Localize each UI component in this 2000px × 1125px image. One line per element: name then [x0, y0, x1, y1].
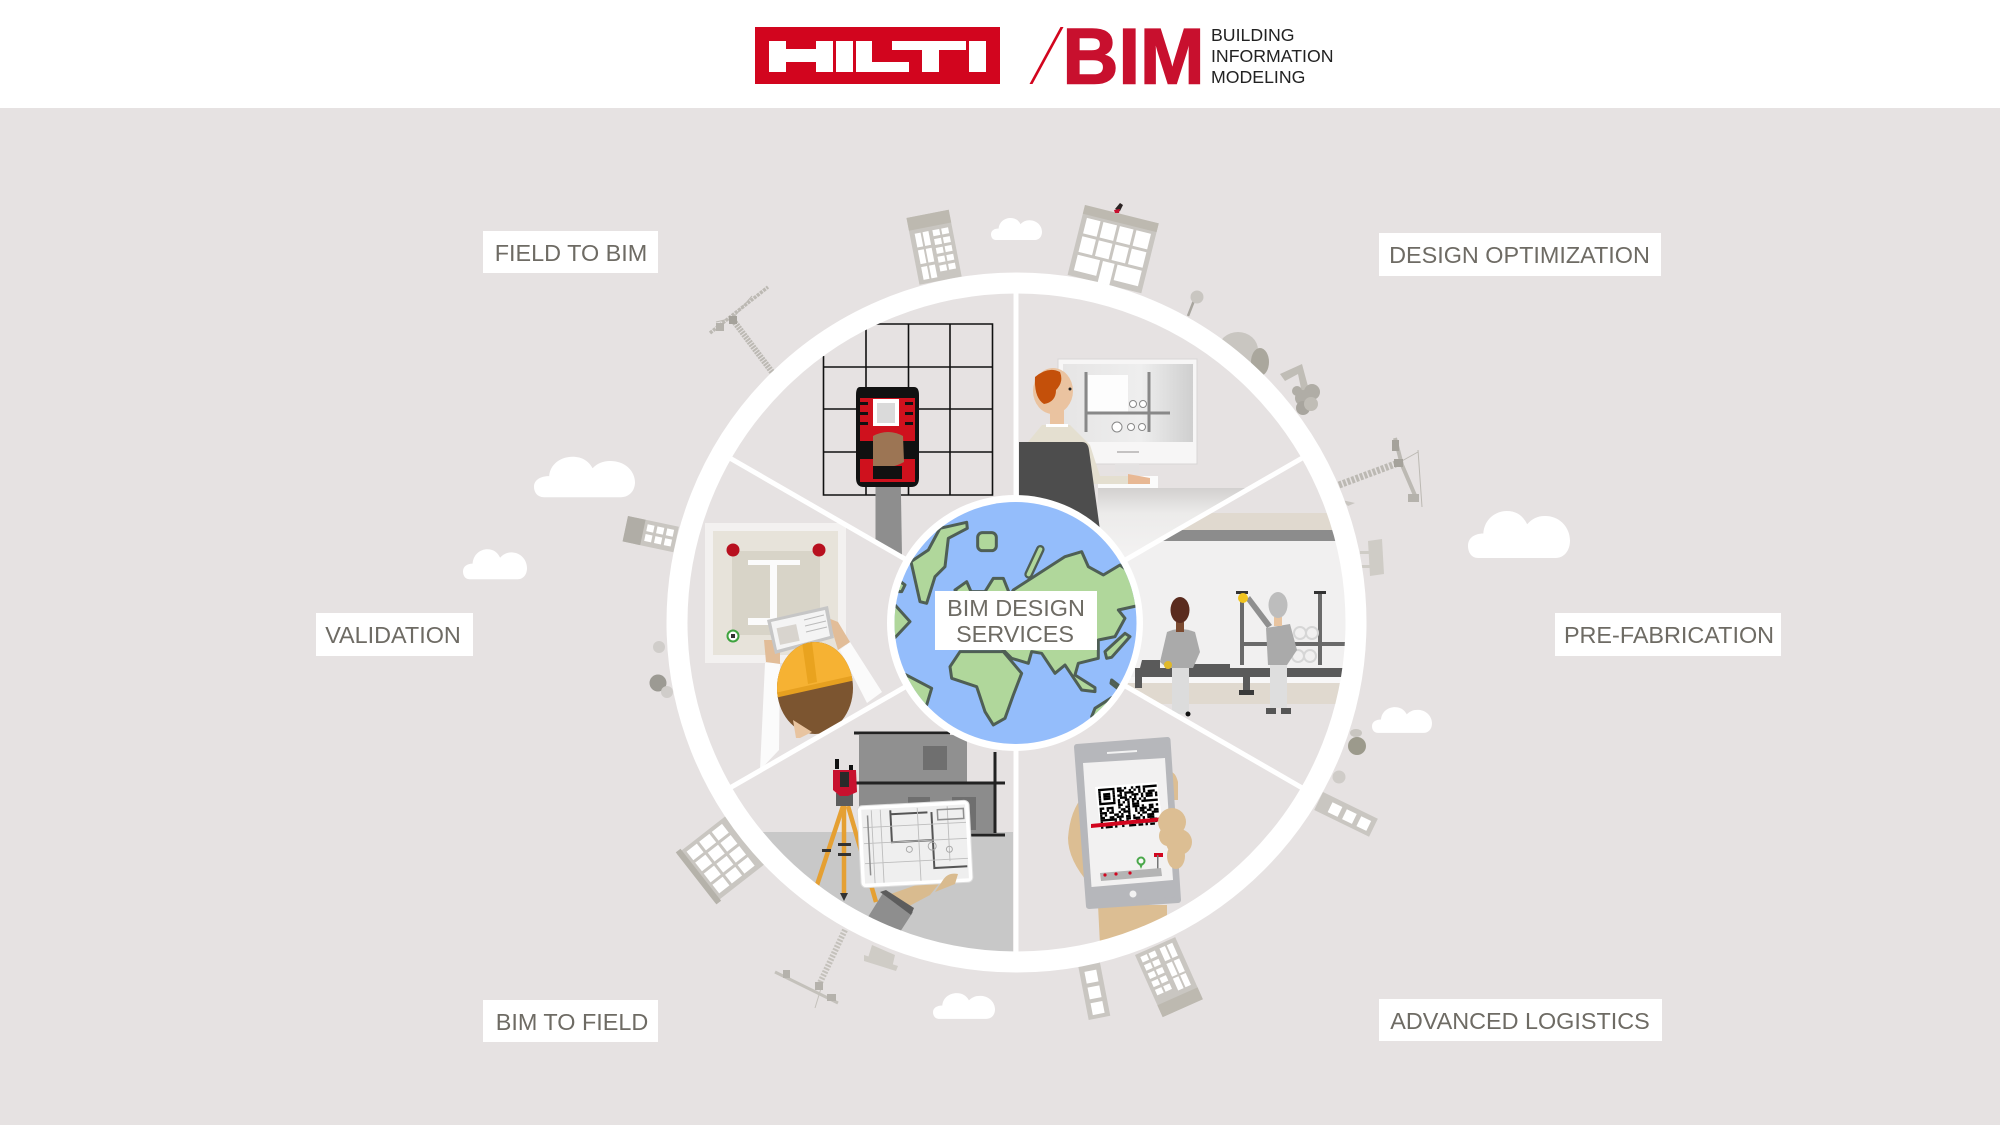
centre label: SERVICES	[956, 621, 1074, 647]
africa	[950, 652, 1022, 725]
label: BIM to field: BIM TO FIELD	[496, 1009, 648, 1035]
label: validation	[316, 613, 473, 656]
keyboard	[1098, 476, 1158, 488]
crane right	[1339, 438, 1422, 507]
hand on scanner	[873, 432, 904, 467]
south-west land	[895, 674, 932, 708]
logo: HILTI	[755, 27, 1000, 84]
wheel interior panels	[660, 324, 1350, 982]
logo tagline: BUILDING	[1211, 25, 1295, 45]
tripod	[817, 793, 876, 902]
building lower storey	[859, 783, 995, 833]
ceiling beam	[1163, 530, 1336, 541]
americas edge	[885, 598, 910, 642]
arctic island fill	[1029, 549, 1040, 574]
arm	[876, 487, 902, 554]
logo tagline	[1211, 25, 1334, 87]
header band	[0, 0, 2000, 108]
label: advanced logistics	[1379, 999, 1662, 1041]
building right lower	[1314, 792, 1378, 837]
logo: BIM: BIM	[1062, 12, 1204, 100]
phone	[1077, 740, 1178, 906]
scan line	[1091, 818, 1159, 828]
label: design optimization: DESIGN OPTIMIZATION	[1389, 242, 1650, 268]
panel: BIM to field	[763, 732, 1013, 952]
total station	[833, 759, 857, 796]
ladder right	[1360, 539, 1384, 576]
rear fingers	[1172, 772, 1178, 800]
wheel rim	[677, 283, 1356, 962]
bushes left	[650, 641, 673, 698]
north island	[978, 533, 996, 551]
floor band	[1128, 683, 1340, 704]
building left	[623, 516, 679, 552]
building window	[923, 746, 947, 770]
label: advanced logistics: ADVANCED LOGISTICS	[1390, 1008, 1650, 1034]
building bottom left	[676, 814, 765, 904]
palm left	[1068, 802, 1084, 878]
label: validation: VALIDATION	[325, 622, 461, 648]
crane top left	[710, 287, 772, 372]
ladder bottom	[864, 945, 898, 971]
cloud bottom	[933, 993, 995, 1019]
chair	[1019, 442, 1100, 530]
plate inner	[732, 551, 820, 635]
surrounding city decoration	[463, 203, 1570, 1020]
building top left	[906, 210, 962, 285]
neck	[793, 720, 812, 738]
australia edge	[1092, 698, 1125, 735]
cloud left small	[463, 549, 527, 579]
desk	[1098, 488, 1245, 557]
pipe rack	[1236, 591, 1345, 665]
cloud right small	[1372, 707, 1432, 733]
designer	[1028, 368, 1150, 484]
scan grid	[824, 324, 992, 495]
forearm	[1098, 905, 1167, 945]
ceiling plate frame	[705, 523, 846, 663]
building bottom large	[1135, 937, 1203, 1017]
eurasia	[985, 552, 1148, 692]
tablet	[767, 606, 834, 654]
cloud left large	[534, 457, 635, 497]
forearm and sleeve	[868, 874, 947, 932]
label: field to BIM: FIELD TO BIM	[495, 240, 647, 266]
plate outer	[713, 531, 838, 655]
street lamp	[1188, 290, 1204, 316]
green anchor dot	[728, 630, 738, 642]
japan	[1105, 633, 1130, 658]
centre label: BIM DESIGN	[947, 595, 1085, 621]
tablet with floor plan	[857, 800, 973, 888]
label: field to BIM	[483, 231, 658, 273]
monitor	[1058, 359, 1197, 472]
logo tagline: MODELING	[1211, 67, 1305, 87]
red anchor dots	[726, 544, 826, 556]
trees	[1218, 332, 1269, 376]
logo tagline: INFORMATION	[1211, 46, 1334, 66]
panel: pre-fabrication	[1110, 513, 1350, 716]
QR code	[1095, 782, 1162, 828]
small west island	[892, 580, 905, 592]
floor	[763, 832, 1013, 952]
building lower windows	[908, 797, 976, 830]
wall	[1110, 541, 1350, 677]
cuff	[873, 466, 902, 479]
worker right	[1238, 592, 1297, 714]
fingers right	[1158, 808, 1192, 869]
cloud right large	[1468, 511, 1570, 558]
scanner device	[856, 387, 919, 487]
wheel spokes	[728, 290, 1304, 955]
europe bumps	[955, 578, 1010, 608]
cloud top	[991, 218, 1042, 240]
panel: design optimization	[1019, 359, 1260, 560]
label: design optimization	[1379, 233, 1661, 276]
panel: advanced logistics	[1068, 740, 1192, 945]
hands	[764, 618, 850, 664]
arms	[760, 642, 882, 770]
islands south-east	[1111, 680, 1120, 689]
conveyor	[1135, 660, 1345, 695]
excavator	[1280, 364, 1320, 415]
arctic island	[1029, 549, 1040, 574]
thumb	[935, 874, 958, 892]
map pin and flag	[1138, 853, 1163, 869]
worker left	[1160, 597, 1200, 716]
I-beam	[748, 560, 800, 625]
building bottom small	[1078, 961, 1110, 1020]
building slabs	[854, 733, 1005, 835]
worker head	[770, 630, 865, 740]
building top right with bird	[1068, 203, 1159, 293]
label: BIM to field	[483, 1000, 658, 1042]
globe	[885, 495, 1148, 751]
beige upper wall band	[1182, 513, 1332, 530]
panel: validation	[705, 523, 882, 770]
centre label	[935, 591, 1097, 650]
round bush right	[1332, 729, 1366, 784]
crane bottom	[775, 930, 845, 1008]
building upper storey	[859, 735, 967, 783]
north america landmass	[911, 522, 967, 603]
label: pre-fabrication	[1555, 613, 1781, 656]
route bar	[1100, 868, 1162, 881]
panel: field to BIM (scanner on grid)	[824, 324, 992, 556]
label: pre-fabrication: PRE-FABRICATION	[1564, 622, 1774, 648]
